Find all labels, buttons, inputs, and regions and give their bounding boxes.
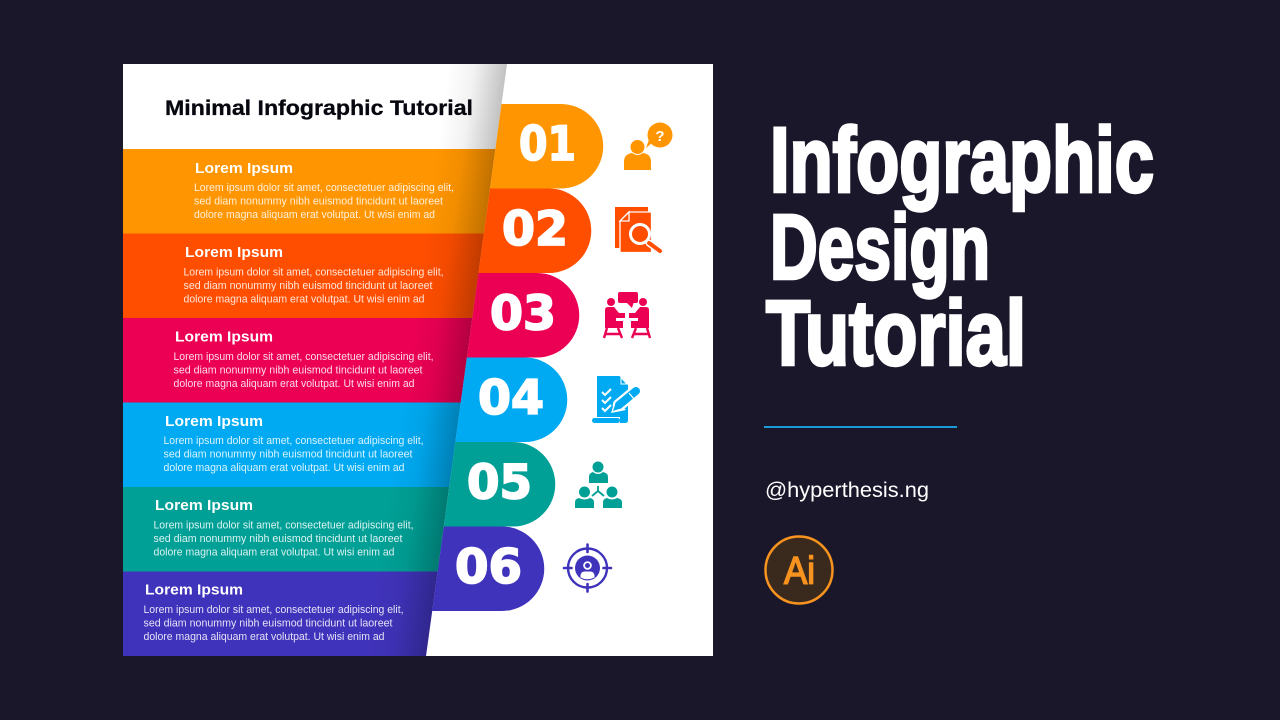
step 3 text: Lorem Ipsum [175, 328, 273, 346]
handle: @hyperthesis.ng [765, 479, 929, 502]
step 4 pill: 04 [478, 371, 544, 426]
step 6 pill: 06 [455, 540, 522, 595]
step 6 text [144, 582, 404, 643]
main heading: Design [770, 196, 990, 298]
fold shadow [349, 64, 507, 656]
step 1 pill [490, 104, 603, 188]
step 5 text [154, 497, 414, 558]
step 5 text: dolore magna aliquam erat volutpat. Ut wisi enim ad [154, 546, 394, 558]
step 4 text: Lorem Ipsum [165, 413, 263, 430]
main heading: Infographic [770, 110, 1154, 212]
step 5 text: Lorem ipsum dolor sit amet, consectetuer adipiscing elit, [154, 520, 414, 532]
icon: team hierarchy [575, 462, 622, 508]
step 6 text: dolore magna aliquam erat volutpat. Ut wisi enim ad [144, 631, 384, 643]
step 2 text [184, 244, 444, 306]
step 5 text: Lorem Ipsum [155, 497, 253, 514]
step 1 text: Lorem ipsum dolor sit amet, consectetuer adipiscing elit, [194, 182, 454, 194]
step 6 text: sed diam nonummy nibh euismod tincidunt ut laoreet [144, 618, 392, 630]
step 3 text: dolore magna aliquam erat volutpat. Ut wisi enim ad [174, 378, 414, 390]
panel: infographic card [123, 64, 713, 656]
step 3 text: Lorem ipsum dolor sit amet, consectetuer adipiscing elit, [174, 351, 434, 363]
step 1 text [194, 160, 454, 221]
divider line [764, 426, 957, 428]
icon: person with question bubble: ? [655, 128, 665, 145]
icon: person with question bubble [624, 122, 672, 170]
icon: two people talking at table [604, 292, 650, 338]
step 2 text: Lorem ipsum dolor sit amet, consectetuer adipiscing elit, [184, 266, 444, 278]
step 4 text: sed diam nonummy nibh euismod tincidunt ut laoreet [164, 448, 412, 460]
step 5 pill [444, 442, 555, 526]
main heading: Tutorial [766, 282, 1026, 384]
icon: target person [564, 544, 611, 592]
step 2 text: sed diam nonummy nibh euismod tincidunt ut laoreet [184, 280, 432, 292]
step 2 pill: 02 [502, 202, 568, 257]
step 1 text: sed diam nonummy nibh euismod tincidunt ut laoreet [194, 196, 443, 208]
step 1 text: Lorem Ipsum [195, 160, 293, 177]
step 5 text: sed diam nonummy nibh euismod tincidunt ut laoreet [154, 533, 402, 545]
coloured bands [123, 149, 495, 656]
icon: document search [615, 207, 660, 252]
step 6 text: Lorem Ipsum [145, 582, 243, 598]
step 2 pill [478, 188, 591, 273]
panel title: Minimal Infographic Tutorial [165, 97, 473, 120]
step 3 text: sed diam nonummy nibh euismod tincidunt ut laoreet [174, 364, 422, 376]
step 3 pill: 03 [490, 286, 556, 342]
step 4 text: dolore magna aliquam erat volutpat. Ut wisi enim ad [164, 462, 404, 474]
step 4 pill [455, 358, 567, 442]
step 2 text: Lorem Ipsum [185, 244, 283, 261]
icon: checklist with pencil [592, 376, 636, 423]
step 6 text: Lorem ipsum dolor sit amet, consectetuer adipiscing elit, [144, 604, 404, 616]
step 3 text [174, 328, 434, 390]
main heading [766, 110, 1154, 384]
icon: Adobe Illustrator badge [766, 536, 832, 604]
step 5 pill: 05 [467, 456, 532, 510]
step 4 text [164, 413, 424, 474]
step 3 pill [467, 273, 579, 358]
step 2 text: dolore magna aliquam erat volutpat. Ut wisi enim ad [184, 294, 424, 306]
icon: Adobe Illustrator badge: Ai [784, 550, 815, 593]
step 4 text: Lorem ipsum dolor sit amet, consectetuer adipiscing elit, [164, 435, 424, 447]
step 6 pill [432, 526, 544, 611]
step 1 pill: 01 [519, 117, 576, 172]
step 1 text: dolore magna aliquam erat volutpat. Ut wisi enim ad [194, 209, 435, 221]
